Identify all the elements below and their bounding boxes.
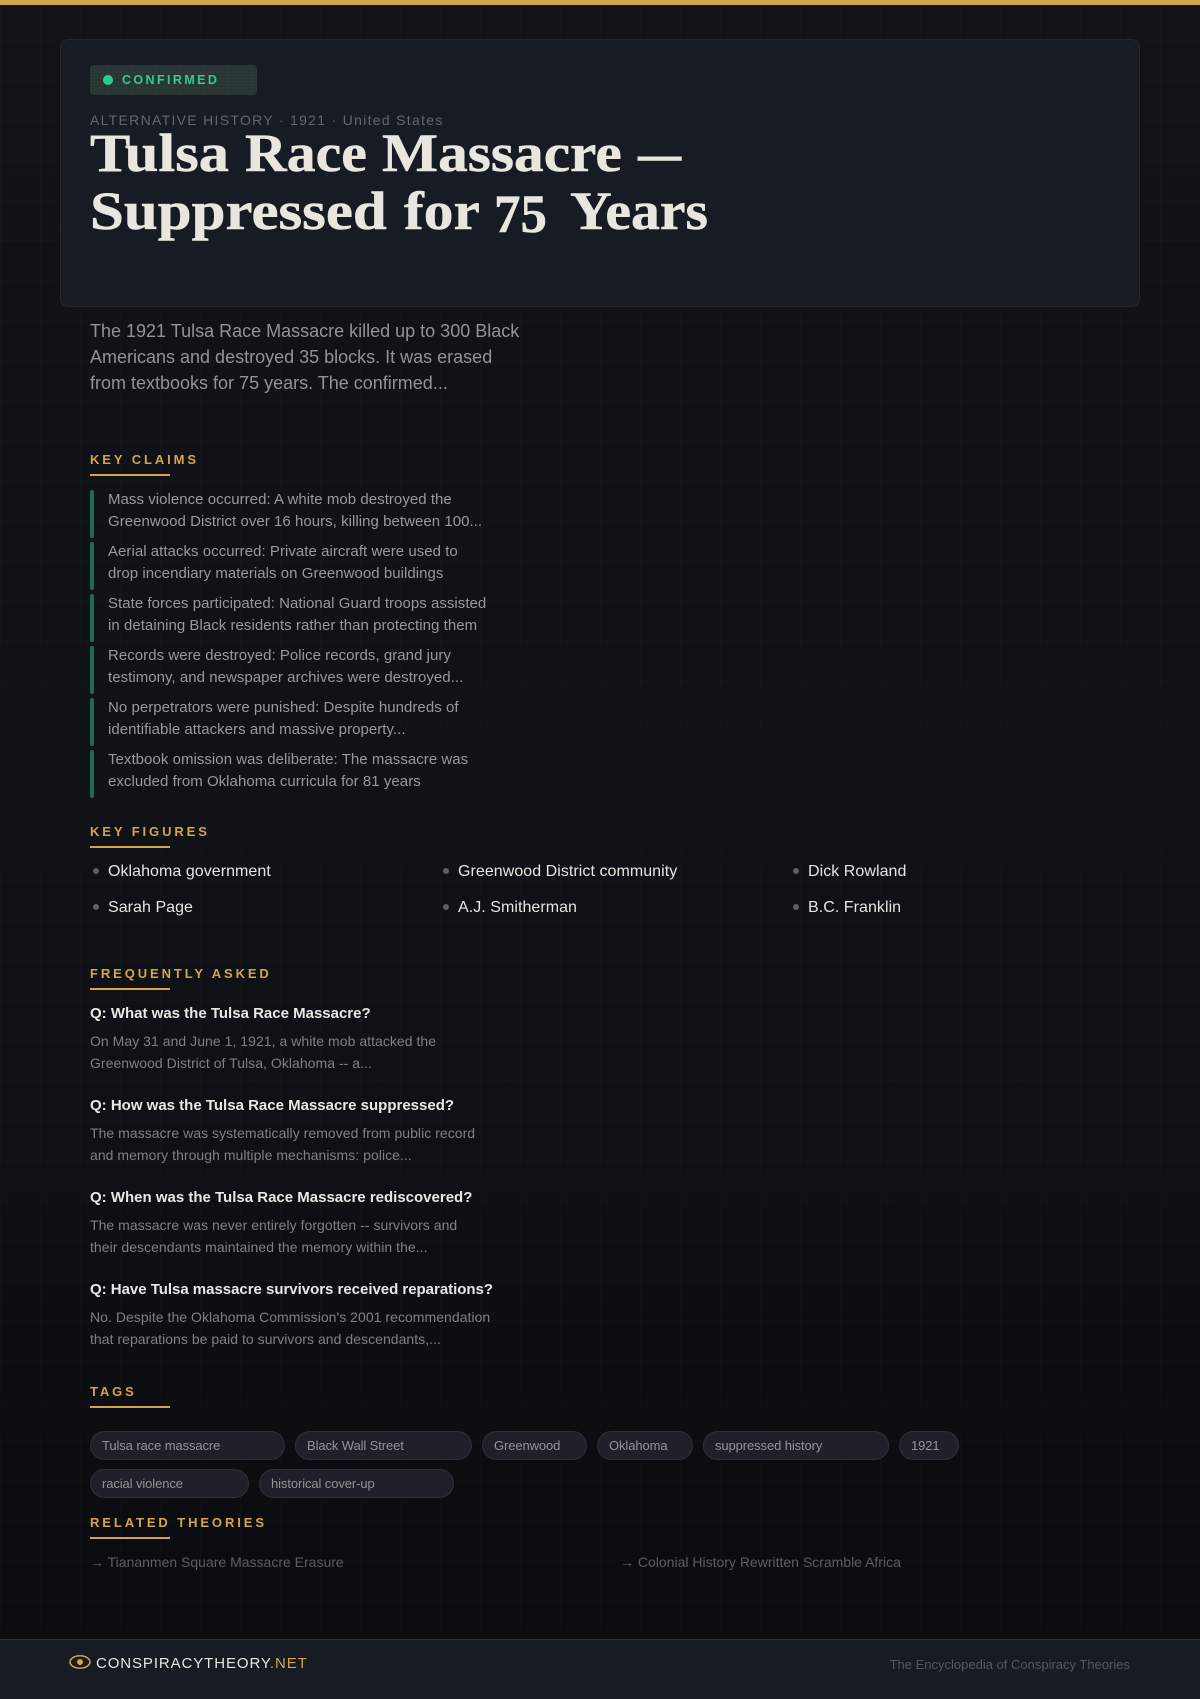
claim 5: No perpetrators were punished: Despite hundreds of <box>108 699 459 716</box>
faq 4: Q: Have Tulsa massacre survivors received reparations? <box>90 1281 493 1298</box>
panel: related theories <box>90 1515 901 1570</box>
title: — <box>638 123 681 183</box>
faq 2: and memory through multiple mechanisms: police... <box>90 1147 412 1163</box>
heading: related theories: RELATED THEORIES <box>90 1515 267 1530</box>
faq 4 <box>90 1281 493 1347</box>
faq 1: Q: What was the Tulsa Race Massacre? <box>90 1005 371 1022</box>
heading: key claims: KEY CLAIMS <box>90 452 199 467</box>
claim 5 <box>90 698 459 746</box>
panel: header card <box>60 39 1140 307</box>
panel: key figures <box>90 824 906 916</box>
tag <box>90 1469 249 1498</box>
claim 4 <box>90 646 463 694</box>
claim 3: in detaining Black residents rather than protecting them <box>108 617 477 634</box>
footer tagline: The Encyclopedia of Conspiracy Theories <box>890 1657 1130 1672</box>
claim 4: testimony, and newspaper archives were destroyed... <box>108 669 463 686</box>
title: Tulsa <box>90 123 229 183</box>
title: for <box>404 181 480 241</box>
faq 2: Q: How was the Tulsa Race Massacre suppressed? <box>90 1097 454 1114</box>
tag: historical cover-up <box>271 1476 375 1491</box>
heading: frequently asked: FREQUENTLY ASKED <box>90 966 272 981</box>
related link 2: → Colonial History Rewritten Scramble Africa <box>620 1554 901 1570</box>
logo wordmark: CONSPIRACYTHEORY.NET <box>96 1655 308 1672</box>
heading: key figures: KEY FIGURES <box>90 824 210 839</box>
figure: B.C. Franklin: B.C. Franklin <box>808 899 901 916</box>
top accent bar <box>0 0 1200 5</box>
claim 1 <box>90 490 482 538</box>
tag <box>295 1431 472 1460</box>
related link 1: → Tiananmen Square Massacre Erasure <box>90 1554 344 1570</box>
tag <box>90 1431 285 1460</box>
claim 6: Textbook omission was deliberate: The massacre was <box>108 751 468 768</box>
tag: suppressed history <box>715 1438 822 1453</box>
title: Massacre <box>382 123 622 183</box>
icon: eye <box>69 1655 91 1669</box>
footer <box>0 1639 1200 1699</box>
faq 3 <box>90 1189 472 1255</box>
tag: Greenwood <box>494 1438 560 1453</box>
panel: frequently asked <box>90 966 493 1347</box>
faq 4: that reparations be paid to survivors and descendants,... <box>90 1331 441 1347</box>
title: Race <box>245 123 367 183</box>
tag <box>703 1431 889 1460</box>
figure: Sarah Page: Sarah Page <box>108 899 193 916</box>
claim 1: Mass violence occurred: A white mob destroyed the <box>108 491 452 508</box>
faq 4: No. Despite the Oklahoma Commission's 2001 recommendation <box>90 1309 490 1325</box>
claim 5: identifiable attackers and massive property... <box>108 721 406 738</box>
faq 3: their descendants maintained the memory within the... <box>90 1239 428 1255</box>
tag: racial violence <box>102 1476 183 1491</box>
faq 3: Q: When was the Tulsa Race Massacre rediscovered? <box>90 1189 472 1206</box>
tag: Tulsa race massacre <box>102 1438 220 1453</box>
faq 2 <box>90 1097 475 1163</box>
title: 75 <box>494 184 547 244</box>
summary paragraph: The 1921 Tulsa Race Massacre killed up to 300 Black <box>90 321 519 341</box>
tag <box>482 1431 587 1460</box>
heading: tags: TAGS <box>90 1384 137 1399</box>
summary paragraph: Americans and destroyed 35 blocks. It was erased <box>90 347 492 367</box>
badge label: CONFIRMED <box>122 73 219 87</box>
badge: confirmed <box>90 65 257 95</box>
claim 6 <box>90 750 468 798</box>
claim 4: Records were destroyed: Police records, grand jury <box>108 647 451 664</box>
claim 1: Greenwood District over 16 hours, killing between 100... <box>108 513 482 530</box>
figure: Dick Rowland: Dick Rowland <box>808 863 906 880</box>
faq 1 <box>90 1005 436 1071</box>
tag <box>597 1431 693 1460</box>
category line: ALTERNATIVE HISTORY · 1921 · United States <box>90 112 444 128</box>
panel: tags <box>90 1384 959 1498</box>
figure: Oklahoma government: Oklahoma government <box>108 863 271 880</box>
badge dot <box>103 75 113 85</box>
faq 1: On May 31 and June 1, 1921, a white mob attacked the <box>90 1033 436 1049</box>
summary paragraph: from textbooks for 75 years. The confirmed... <box>90 373 448 393</box>
summary paragraph <box>90 321 520 393</box>
claim 2 <box>90 542 458 590</box>
tag <box>259 1469 454 1498</box>
title <box>90 123 708 244</box>
faq 2: The massacre was systematically removed from public record <box>90 1125 475 1141</box>
tag <box>899 1431 959 1460</box>
faq 3: The massacre was never entirely forgotten -- survivors and <box>90 1217 457 1233</box>
title: Suppressed <box>90 181 387 241</box>
claim 3: State forces participated: National Guard troops assisted <box>108 595 486 612</box>
panel: key claims <box>90 452 486 798</box>
figure: Greenwood District community: Greenwood District community <box>458 863 677 880</box>
figure: A.J. Smitherman: A.J. Smitherman <box>458 899 577 916</box>
tag: Oklahoma <box>609 1438 667 1453</box>
claim 2: Aerial attacks occurred: Private aircraft were used to <box>108 543 458 560</box>
claim 2: drop incendiary materials on Greenwood buildings <box>108 565 443 582</box>
tag: 1921 <box>911 1438 940 1453</box>
title: Years <box>570 181 708 241</box>
claim 6: excluded from Oklahoma curricula for 81 years <box>108 773 421 790</box>
faq 1: Greenwood District of Tulsa, Oklahoma -- a... <box>90 1055 372 1071</box>
claim 3 <box>90 594 486 642</box>
tag: Black Wall Street <box>307 1438 404 1453</box>
